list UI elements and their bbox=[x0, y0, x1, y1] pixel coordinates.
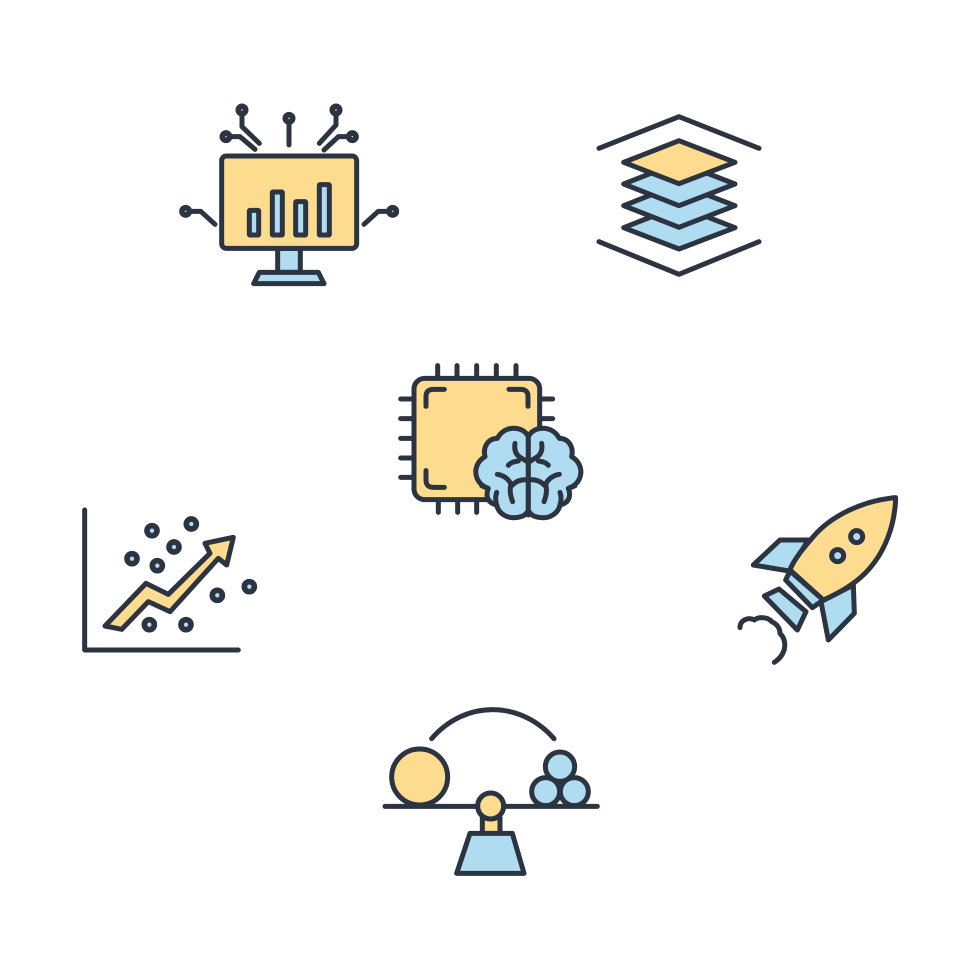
fulcrum base bbox=[457, 833, 524, 873]
chip pins bbox=[401, 366, 553, 512]
chip body bbox=[414, 378, 540, 500]
brain bbox=[476, 428, 581, 518]
brain left hemisphere bbox=[476, 428, 528, 518]
balance arc bbox=[432, 710, 554, 739]
exhaust smoke bbox=[740, 618, 785, 662]
monitor screen bbox=[222, 156, 357, 248]
rocket exhaust nozzle bbox=[764, 589, 806, 630]
chart axes bbox=[85, 510, 238, 650]
small weights bbox=[532, 752, 588, 806]
scatter dots bbox=[127, 519, 254, 630]
fulcrum pivot bbox=[478, 793, 504, 819]
bottom layer bbox=[624, 206, 735, 249]
icon: processor chip with brain bbox=[401, 366, 581, 518]
lower chevron bbox=[599, 242, 759, 274]
fulcrum neck bbox=[482, 818, 500, 834]
large weight bbox=[392, 749, 448, 805]
icon: rocket bbox=[740, 498, 896, 662]
second layer bbox=[624, 162, 735, 206]
rocket windows bbox=[832, 531, 863, 562]
rising arrow bbox=[105, 537, 233, 629]
rocket body bbox=[790, 498, 896, 600]
brain right hemisphere bbox=[528, 428, 581, 518]
third layer bbox=[624, 184, 735, 227]
icon: growth chart with scatter dots bbox=[85, 510, 254, 650]
circuit lines bbox=[182, 106, 396, 224]
icon: stacked layers bbox=[599, 117, 759, 274]
icon: balance scale bbox=[385, 710, 597, 873]
monitor stand bbox=[254, 248, 324, 284]
balance beam bbox=[385, 799, 597, 814]
top layer bbox=[624, 141, 735, 184]
rocket fins bbox=[753, 540, 854, 640]
upper chevron bbox=[599, 117, 759, 148]
bar chart bbox=[249, 185, 329, 235]
icon: monitor with bar chart and circuit lines bbox=[182, 106, 396, 284]
chip corner marks bbox=[426, 389, 528, 487]
rocket collar bbox=[786, 571, 823, 608]
